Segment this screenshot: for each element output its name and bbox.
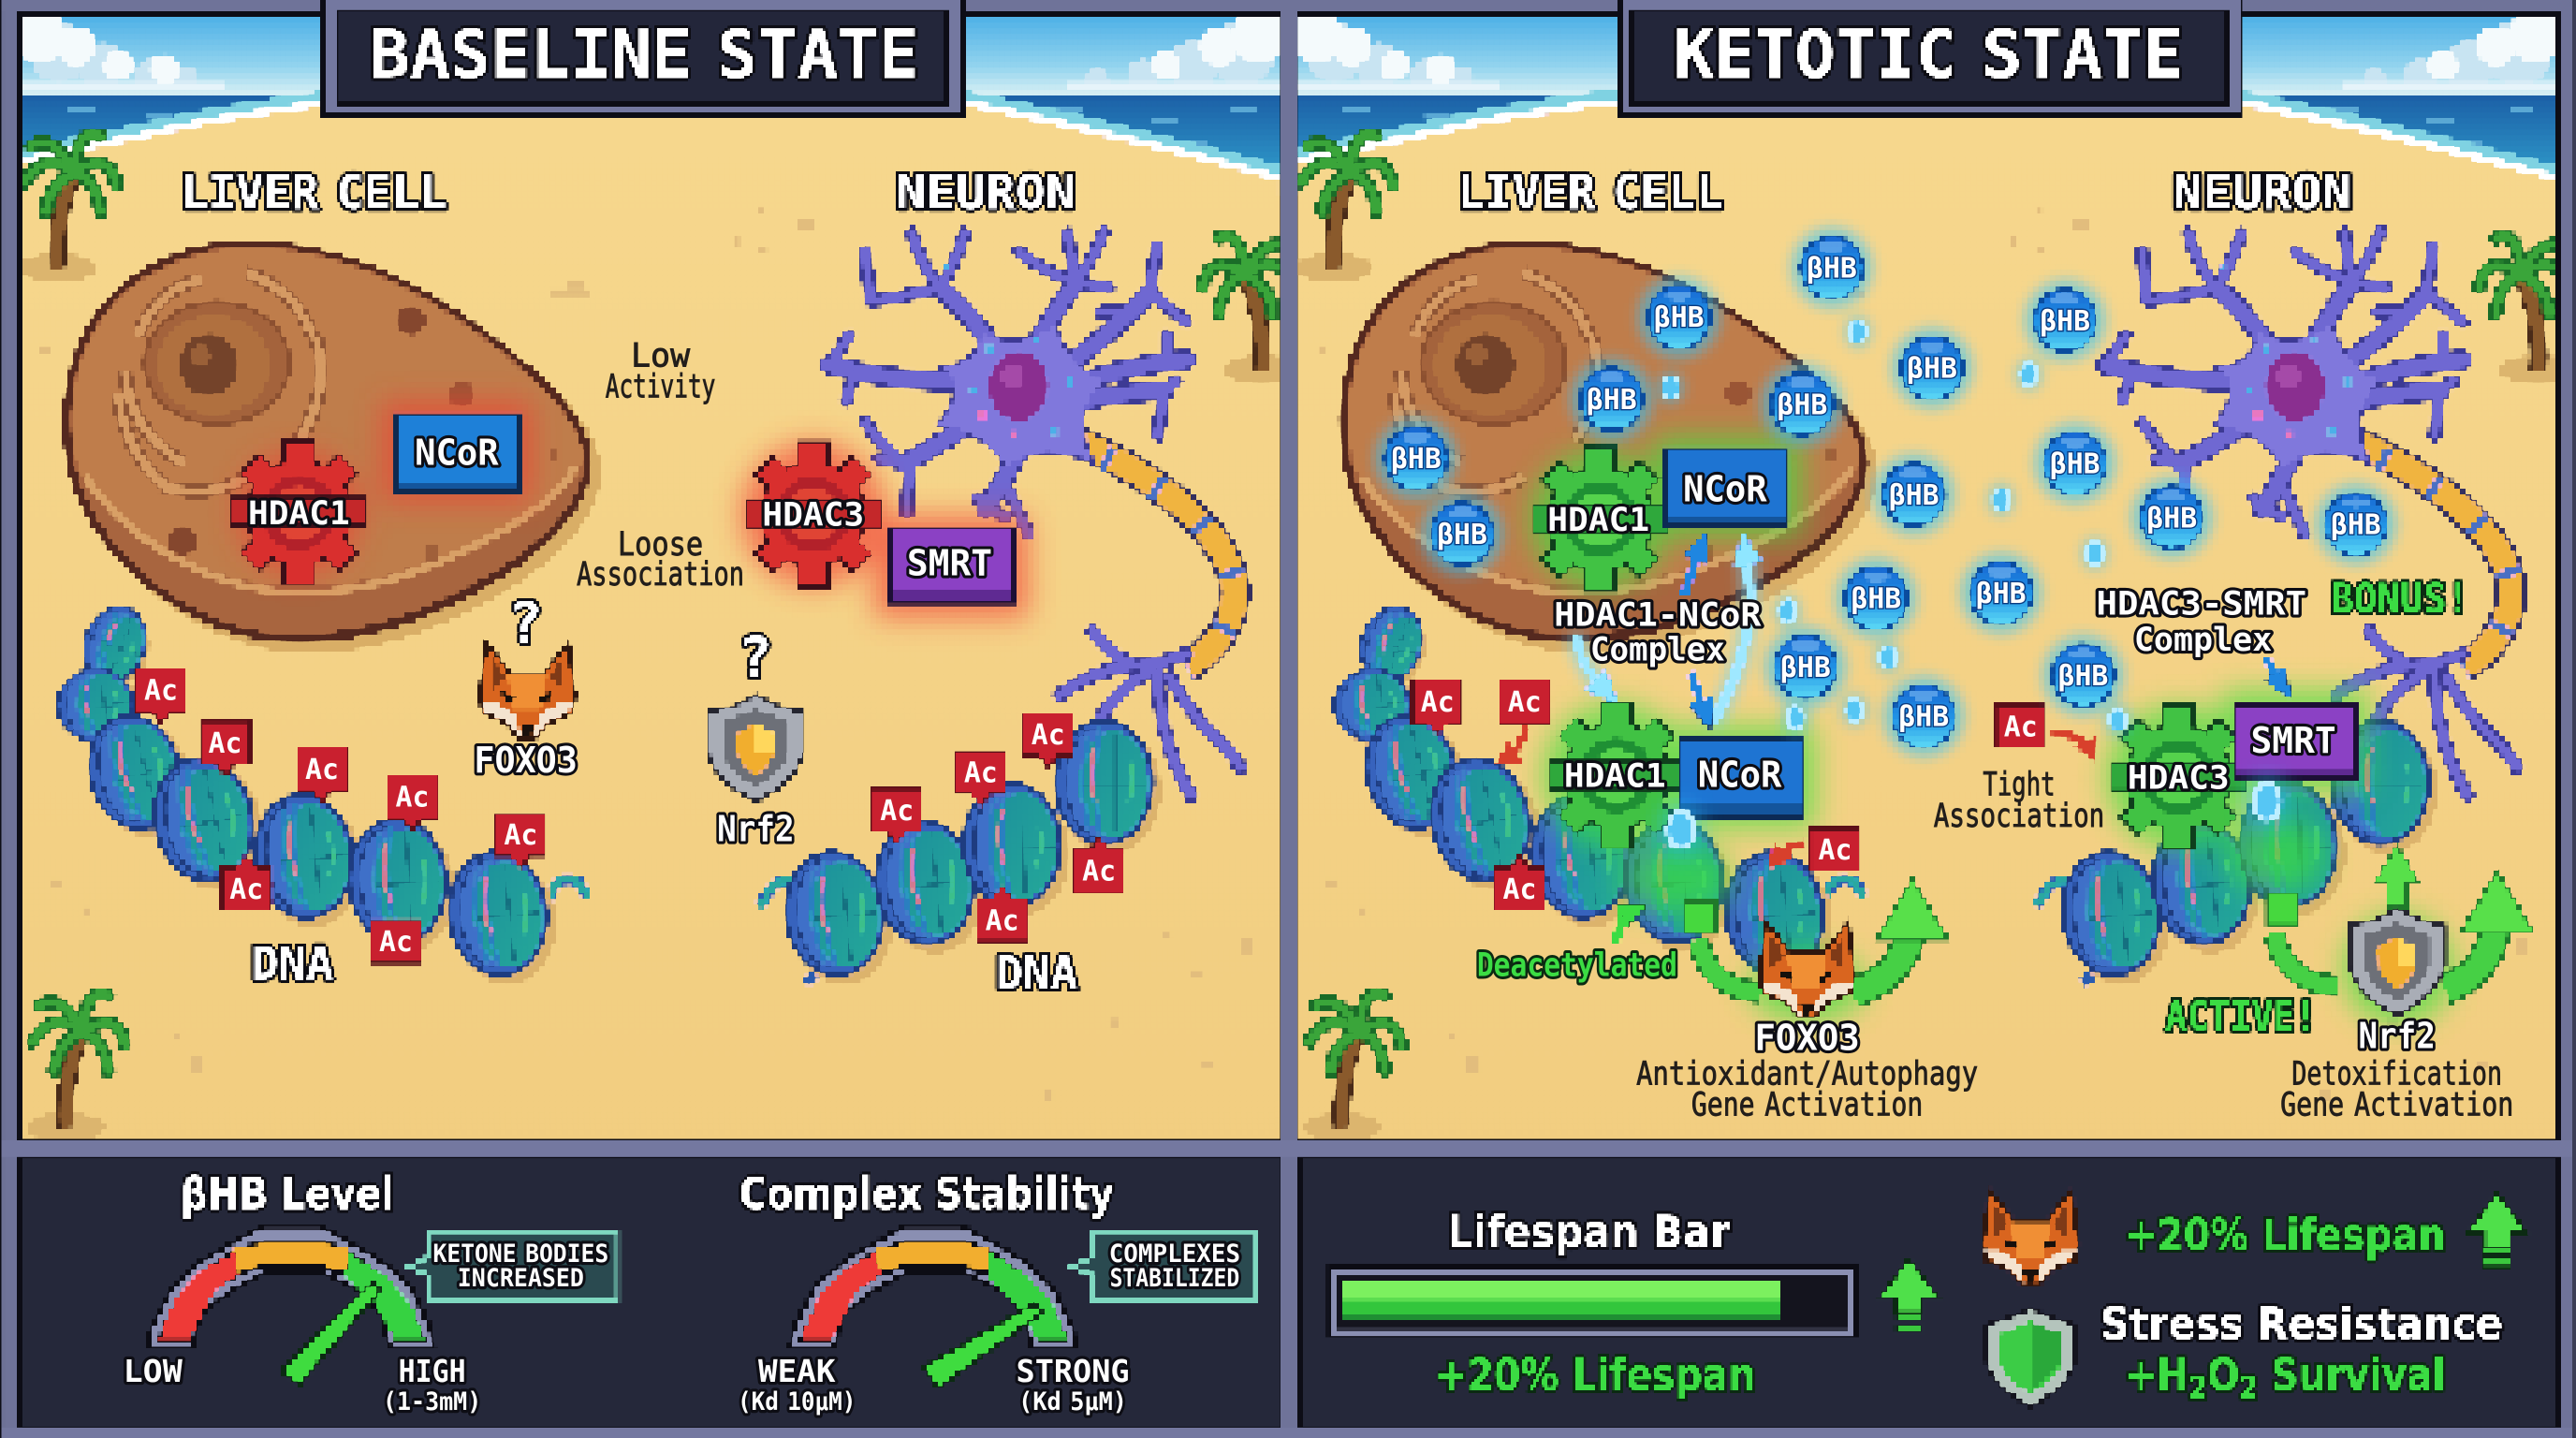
- callout box: complexes: [1073, 1231, 1257, 1299]
- label: SMRT on DNA: SMRT: [2250, 720, 2336, 762]
- note: low activity: Activity: [606, 368, 715, 406]
- arrow: blue to SMRT: [2265, 657, 2280, 682]
- acetyl tag labels: Ac: [208, 727, 242, 760]
- label: weak: [738, 1353, 856, 1416]
- DNA chain, neuron side: [759, 718, 1162, 990]
- βHB molecules: [1375, 227, 2397, 856]
- βHB molecule labels: [1391, 253, 2381, 734]
- label: FOXO3: FOXO3: [474, 740, 578, 782]
- label: HDAC1 on DNA: HDAC1: [1564, 757, 1666, 796]
- panel: gauges background: [22, 1160, 1278, 1428]
- βHB molecule labels: βHB: [1907, 353, 1957, 386]
- callout text: complexes: [1109, 1240, 1240, 1293]
- acetyl tag labels: Ac: [880, 795, 914, 828]
- callout text: ketone bodies: INCREASED: [458, 1265, 584, 1293]
- βHB molecule labels: βHB: [2058, 660, 2108, 693]
- acetyl tag labels: Ac: [1421, 686, 1455, 719]
- arrow: cyan recruitment: [1712, 555, 1749, 723]
- neuron: [829, 231, 1240, 795]
- note: low activity: Low: [631, 336, 691, 374]
- label: HDAC1-NCoR complex: HDAC1-NCoR: [1554, 596, 1762, 635]
- acetyl tag labels: Ac: [305, 754, 339, 786]
- baseline panel labels: [181, 166, 1077, 1001]
- heading: neuron: NEURON: [896, 166, 1076, 221]
- gear: HDAC3 on DNA: [2110, 707, 2247, 848]
- gear: HDAC1 inactive: [230, 442, 368, 583]
- gauges small text: [124, 1240, 1240, 1416]
- callout text: ketone bodies: [432, 1240, 608, 1293]
- note: loose association: [577, 525, 744, 594]
- βHB molecule labels: βHB: [1587, 384, 1637, 417]
- βHB molecule labels: βHB: [2331, 508, 2381, 541]
- value: H2O2 survival: Survival: [2258, 1350, 2445, 1401]
- βHB molecule labels: βHB: [1780, 652, 1831, 684]
- label: NCoR on DNA: NCoR: [1698, 755, 1782, 797]
- note: FOXO3 gene activation: Antioxidant/Autophagy: [1636, 1054, 1978, 1093]
- βHB molecule labels: βHB: [1777, 389, 1827, 421]
- box: NCoR: [394, 413, 520, 494]
- label: strong: STRONG: [1017, 1353, 1130, 1389]
- label: HDAC3-SMRT complex: Complex: [2134, 621, 2272, 659]
- acetyl tag labels: Ac: [144, 675, 178, 708]
- fox: FOXO3 active: [1760, 922, 1855, 1017]
- label: HDAC1 in cell: HDAC1: [1547, 501, 1649, 539]
- icon: green shield: [1986, 1308, 2075, 1406]
- callout text: complexes: COMPLEXES: [1109, 1240, 1240, 1269]
- panel art: ketotic: [1328, 227, 2533, 1025]
- acetyl tag labels: Ac: [964, 756, 998, 789]
- label: high: (1-3mM): [383, 1388, 481, 1416]
- acetyl tag labels: Ac: [504, 819, 537, 852]
- ketotic small labels: [1391, 253, 2513, 1124]
- acetyl tag labels: Ac: [229, 873, 263, 906]
- label: NCoR in cell: NCoR: [1683, 468, 1767, 510]
- βHB molecule labels: βHB: [2146, 502, 2197, 535]
- arrow: lifespan up: [1880, 1258, 1939, 1332]
- red arrows: acetyl removal: [1508, 726, 2089, 858]
- box: SMRT on DNA: [2232, 701, 2358, 781]
- title plaque: ketotic: [1617, 0, 2244, 118]
- gear: HDAC1 in cell: [1531, 448, 1669, 590]
- label: NCoR: NCoR: [415, 433, 499, 475]
- label: SMRT: SMRT: [907, 542, 992, 584]
- baseline small labels: [144, 336, 1116, 959]
- acetyl tag labels: [144, 675, 1116, 959]
- label: Nrf2: Nrf2: [2358, 1016, 2436, 1058]
- acetyl tag labels: Ac: [396, 782, 429, 814]
- liver cell: [1339, 240, 1878, 653]
- value: lifespan under bar: +20% Lifespan: [1435, 1350, 1755, 1401]
- acetyl tag labels: [1421, 686, 2038, 906]
- label: high: HIGH: [399, 1353, 466, 1389]
- βHB molecule labels: βHB: [1391, 443, 1442, 476]
- arrow: blue down to NCoR: [1690, 672, 1704, 710]
- note: Nrf2 gene activation: Detoxification: [2291, 1054, 2502, 1093]
- FOXO3 activation arrows: [1684, 879, 1949, 992]
- acetyl tag labels: Ac: [379, 926, 413, 959]
- acetyl tags: [137, 668, 1123, 962]
- gauge: βHB level: [148, 1225, 433, 1386]
- lifespan bar: [1327, 1265, 1858, 1339]
- callout: active: ACTIVE!: [2165, 992, 2317, 1040]
- label: HDAC1-NCoR complex: Complex: [1590, 631, 1725, 669]
- βHB molecule labels: βHB: [1898, 701, 1949, 734]
- red glow: HDAC3 and SMRT: [741, 442, 1029, 618]
- icon: fox: [1983, 1190, 2078, 1284]
- label: weak: (Kd 10μM): [738, 1388, 856, 1416]
- label: HDAC3: HDAC3: [762, 496, 864, 535]
- callout: deacetylated: Deacetylated: [1477, 946, 1677, 985]
- value: H2O2 survival: +H: [2125, 1350, 2200, 1401]
- heading: lifespan bar: Lifespan Bar: [1447, 1207, 1731, 1258]
- note: Nrf2 gene activation: [2280, 1054, 2513, 1124]
- label: weak: WEAK: [758, 1353, 835, 1389]
- acetyl tag labels: Ac: [2004, 711, 2038, 743]
- label: DNA right: DNA: [996, 946, 1077, 1001]
- liver cell: [63, 240, 602, 653]
- callout text: complexes: STABILIZED: [1110, 1265, 1239, 1293]
- box: NCoR on DNA: [1677, 736, 1806, 818]
- label: question mark over fox: ?: [509, 592, 543, 656]
- label: HDAC3-SMRT complex: HDAC3-SMRT: [2097, 584, 2306, 623]
- DNA chain, liver side: [51, 596, 588, 990]
- gear: HDAC3 inactive: [744, 444, 882, 585]
- acetyl tag labels: Ac: [1082, 856, 1116, 888]
- βHB molecule labels: βHB: [2050, 448, 2100, 480]
- value: H2O2 survival: 2: [2188, 1370, 2207, 1406]
- note: low activity: [606, 336, 715, 406]
- title: ketotic state: KETOTIC STATE: [1674, 16, 2184, 93]
- arrow glow: cyan: [1575, 555, 1749, 723]
- heading: βHB level: βHB Level: [181, 1169, 394, 1221]
- arrow: fox lifespan up: [2467, 1193, 2526, 1267]
- heading: liver cell: LIVER CELL: [1457, 166, 1723, 221]
- value: fox lifespan: +20% Lifespan: [2125, 1211, 2445, 1262]
- shield: Nrf2 active: [2349, 909, 2445, 1016]
- gear: HDAC1 on DNA: [1547, 705, 1686, 846]
- acetyl tag labels: Ac: [1503, 873, 1536, 906]
- label: FOXO3: FOXO3: [1754, 1018, 1860, 1060]
- shield: Nrf2 inactive: [708, 695, 803, 801]
- acetyl tag labels: Ac: [1508, 686, 1542, 719]
- βHB molecule labels: βHB: [1851, 582, 1901, 615]
- value: H2O2 survival: O: [2207, 1350, 2239, 1401]
- DNA chain, liver side: [1328, 596, 1865, 990]
- βHB molecule labels: βHB: [1807, 253, 1857, 286]
- note: loose association: Association: [577, 555, 744, 594]
- label: high: [383, 1353, 481, 1416]
- red glow: HDAC1 and NCoR: [237, 401, 533, 575]
- gauge: complex stability: [790, 1225, 1076, 1388]
- βHB molecule labels: βHB: [2040, 305, 2090, 338]
- heading: liver cell: LIVER CELL: [181, 166, 446, 221]
- box: SMRT: [887, 526, 1016, 605]
- label: HDAC3-SMRT complex: [2097, 584, 2306, 659]
- acetyl tags: [1412, 681, 2045, 910]
- note: tight association: Association: [1934, 797, 2104, 835]
- heading: neuron: NEURON: [2173, 166, 2351, 221]
- title plaque: baseline: [320, 0, 964, 118]
- neuron: [2106, 231, 2517, 795]
- note: tight association: Tight: [1983, 765, 2056, 803]
- value: H2O2 survival: 2: [2239, 1370, 2258, 1406]
- panel: baseline scene background: [13, 10, 1301, 1142]
- arrow: cyan down to gear: [1575, 634, 1602, 687]
- ketotic panel headings: [1457, 166, 2470, 1040]
- title: baseline state: BASELINE STATE: [370, 16, 918, 93]
- heading: stress resistance: Stress Resistance: [2100, 1299, 2503, 1350]
- callout box: ketone bodies: [409, 1231, 618, 1299]
- callout text: ketone bodies: KETONE BODIES: [432, 1240, 608, 1269]
- note: loose association: Loose: [618, 525, 703, 564]
- note: FOXO3 gene activation: Gene Activation: [1691, 1086, 1923, 1124]
- label: DNA left: DNA: [252, 936, 333, 990]
- arrow: deacetylated pointer: [1617, 914, 1630, 945]
- note: Nrf2 gene activation: Gene Activation: [2280, 1086, 2513, 1124]
- arrow: blue to NCoR: [1684, 552, 1699, 594]
- panel art: baseline: [51, 231, 1240, 990]
- βHB molecule labels: βHB: [1437, 519, 1487, 551]
- heading: complex stability: Complex Stability: [739, 1169, 1114, 1221]
- fox: FOXO3 inactive: [479, 642, 575, 738]
- note: FOXO3 gene activation: [1636, 1054, 1978, 1124]
- βHB molecule labels: βHB: [1889, 479, 1939, 512]
- label: HDAC1-NCoR complex: [1554, 596, 1762, 669]
- label: low: LOW: [124, 1353, 183, 1389]
- label: question mark over shield: ?: [739, 626, 772, 691]
- callout: bonus: BONUS!: [2331, 576, 2470, 624]
- label: Nrf2: Nrf2: [717, 809, 795, 851]
- βHB molecule labels: βHB: [1654, 301, 1705, 334]
- βHB molecule labels: βHB: [1976, 578, 2027, 610]
- green glow: all complexes: [1531, 437, 2454, 1025]
- panel: ketotic scene background: [1290, 10, 2576, 1142]
- label: HDAC1: HDAC1: [248, 494, 350, 533]
- acetyl tag labels: Ac: [986, 904, 1019, 937]
- acetyl tag labels: Ac: [1818, 834, 1852, 867]
- panel: outcomes background: [1301, 1160, 2556, 1428]
- note: tight association: [1934, 765, 2104, 835]
- Nrf2 activation arrows: [2267, 844, 2533, 990]
- acetyl tag labels: Ac: [1032, 719, 1065, 752]
- label: HDAC3 on DNA: HDAC3: [2128, 758, 2230, 797]
- label: strong: [1017, 1353, 1130, 1416]
- DNA chain, neuron side: [2036, 718, 2438, 990]
- small text layer: [124, 253, 2513, 1416]
- box: NCoR in cell: [1662, 447, 1789, 529]
- label: strong: (Kd 5μM): [1018, 1388, 1127, 1416]
